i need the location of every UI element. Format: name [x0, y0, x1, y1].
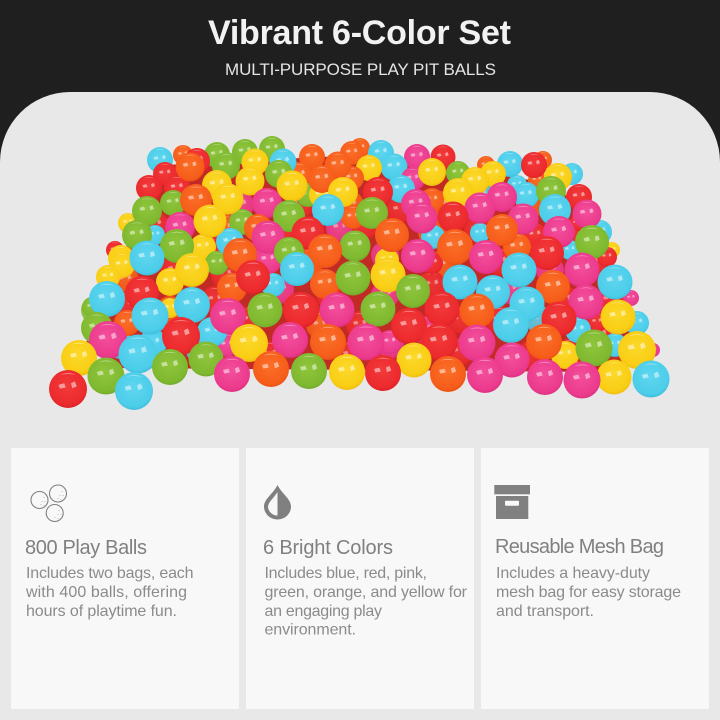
panel: 6 Bright Colors	[246, 448, 474, 709]
text block: balls description: hours of playtime fun.	[26, 603, 177, 620]
image: pile of colourful play balls	[49, 136, 670, 410]
heading: 6 Bright Colors: 6 Bright Colors	[263, 537, 393, 559]
text block: balls description: Includes two bags, each	[26, 565, 194, 582]
text block: mesh bag description: Includes a heavy-duty	[496, 565, 650, 582]
title: Vibrant 6-Color Set	[208, 14, 511, 52]
icon: half-filled drop	[264, 485, 291, 520]
text block: colors description: an engaging play	[264, 603, 382, 620]
text block: balls description: with 400 balls, offering	[25, 584, 187, 601]
text block: mesh bag description: and transport.	[496, 603, 594, 620]
subtitle: MULTI-PURPOSE PLAY PIT BALLS	[225, 60, 496, 79]
text block: colors description	[264, 565, 468, 638]
text block: colors description: environment.	[264, 622, 356, 638]
icon: storage box	[494, 485, 530, 519]
heading: Reusable Mesh Bag: Reusable Mesh Bag	[495, 536, 664, 558]
panel: 800 Play Balls	[11, 448, 239, 709]
panel: Reusable Mesh Bag	[481, 448, 709, 709]
text block: balls description	[25, 565, 194, 620]
icon: three balls	[31, 485, 66, 522]
text block: colors description: Includes blue, red, pink,	[264, 565, 427, 582]
text block: mesh bag description	[496, 565, 681, 620]
text block: colors description: green, orange, and yellow for	[264, 584, 468, 601]
heading: 800 Play Balls: 800 Play Balls	[25, 537, 147, 559]
text block: mesh bag description: mesh bag for easy storage	[496, 584, 681, 601]
